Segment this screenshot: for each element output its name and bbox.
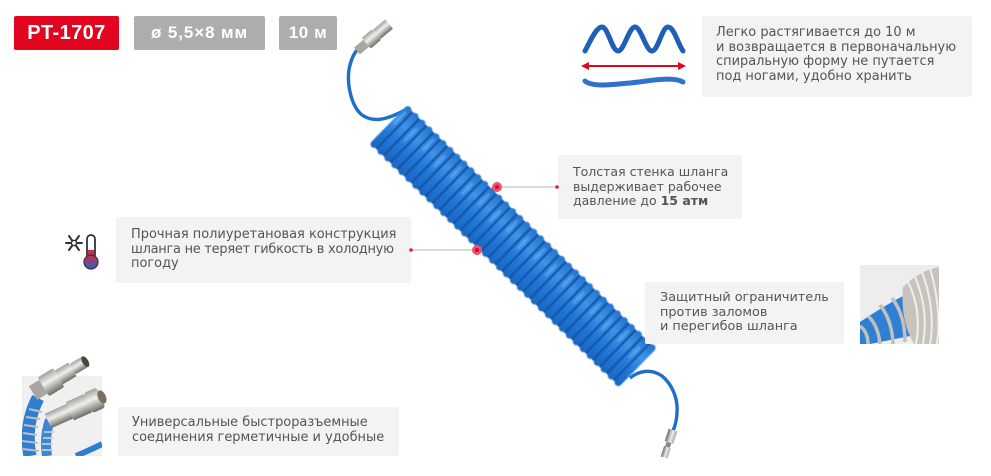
callout: wall pressure: Толстая стенка шланга: [573, 164, 728, 179]
callout: quick connectors: [118, 407, 399, 456]
badge: diameter: ø 5,5×8 мм: [151, 23, 248, 42]
photo: kink guard spring: [860, 265, 940, 344]
callout: wall pressure: [558, 155, 742, 219]
badge: length: [279, 16, 337, 50]
leader line: wall: [492, 182, 559, 192]
callout: kink guard: [645, 282, 844, 344]
callout: quick connectors: Универсальные быстроразъемные: [132, 415, 368, 430]
badge: diameter: [134, 16, 265, 50]
bottom connector: [660, 429, 677, 459]
coil body: [371, 107, 655, 385]
callout: cold resistance: погоду: [131, 256, 179, 271]
callout: stretch: спиральную форму не путается: [716, 54, 934, 69]
top hose tail: [348, 49, 405, 119]
top connector: [353, 19, 394, 56]
photo: quick connectors: [22, 351, 110, 456]
icon: coiled spring: [585, 27, 683, 51]
badge: model: [14, 16, 119, 50]
callout: cold resistance: шланга не теряет гибкость в холодную: [131, 242, 394, 256]
badge: model: PT-1707: [27, 22, 106, 44]
callout: cold resistance: Прочная полиуретановая конструкция: [131, 227, 396, 242]
callout: kink guard: и перегибов шланга: [660, 319, 798, 334]
callout: stretch: под ногами, удобно хранить: [716, 68, 912, 84]
icon: straight hose: [585, 79, 683, 85]
callout: kink guard: против заломов: [660, 304, 767, 320]
callout: kink guard: Защитный ограничитель: [660, 290, 829, 305]
callout: wall pressure: давление до 15 атм: [573, 193, 708, 208]
icon: red double arrow: [581, 62, 686, 70]
leader line: polyurethane: [409, 245, 482, 255]
callout: stretch: Легко растягивается до 10 м: [716, 25, 915, 40]
bottom hose tail: [630, 371, 677, 431]
icon: snowflake and thermometer: [66, 235, 98, 269]
callout: quick connectors: соединения герметичные и удобные: [132, 430, 384, 444]
callout: stretch: [702, 16, 972, 97]
callout: stretch: и возвращается в первоначальную: [716, 40, 956, 54]
callout: wall pressure: выдерживает рабочее: [573, 178, 722, 194]
badge: length: 10 м: [289, 23, 327, 42]
callout: cold resistance: [116, 217, 411, 283]
